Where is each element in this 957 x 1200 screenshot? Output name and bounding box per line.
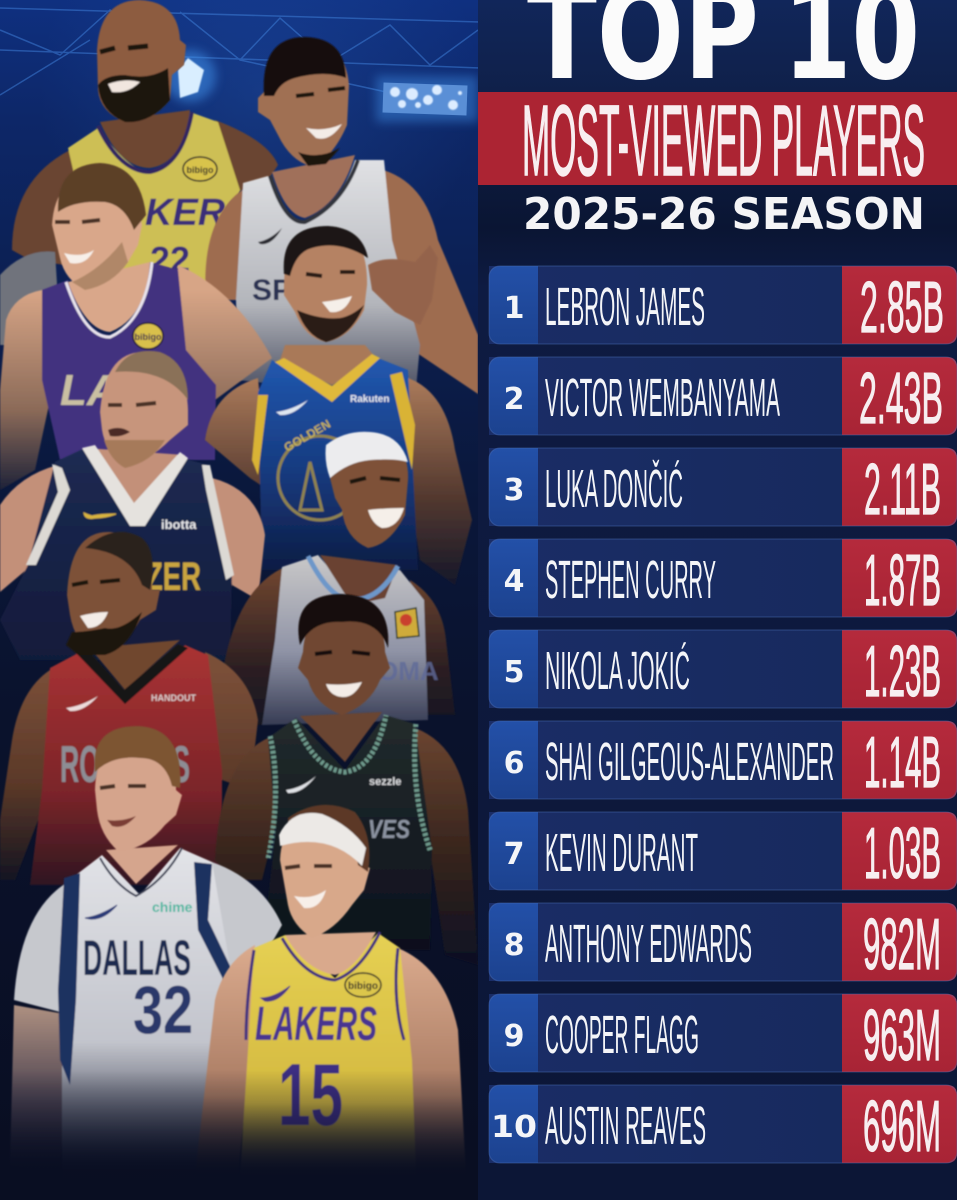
row 8: 8 [504, 928, 524, 963]
jersey lettering: OMA [378, 656, 439, 686]
jersey lettering: ZER [146, 555, 201, 599]
chest [272, 155, 355, 218]
smile [326, 682, 362, 697]
bibigo patch [183, 157, 217, 181]
hair [264, 37, 346, 96]
jersey trim [26, 464, 234, 580]
jersey trim [246, 948, 404, 1040]
jersey lettering: SP [252, 274, 292, 307]
ibotta logo: ibotta [161, 517, 197, 532]
nike swoosh [276, 400, 308, 415]
row 6 [489, 721, 957, 803]
head [100, 352, 188, 468]
rakuten logo: Rakuten [350, 394, 389, 405]
row 1: 1 [504, 291, 524, 326]
jersey [0, 448, 232, 660]
arms [0, 652, 258, 880]
head [280, 815, 370, 938]
jersey trim [252, 372, 415, 475]
sponsor patch [395, 608, 419, 638]
hair [85, 532, 153, 590]
eyes [100, 786, 146, 788]
player: Cooper Flagg [10, 726, 282, 1180]
chest [285, 932, 376, 975]
eyes [285, 866, 332, 868]
jersey [258, 358, 418, 570]
smile [368, 508, 404, 528]
smile [306, 124, 342, 139]
eyes [350, 478, 400, 482]
chest [90, 640, 180, 690]
row 10: 10 [491, 1110, 537, 1145]
player: LeBron James [0, 0, 278, 345]
jersey [236, 160, 420, 400]
nike swoosh [84, 513, 116, 518]
row 9: 9 [504, 1019, 524, 1054]
jersey neckline [270, 160, 358, 222]
row 4: 4 [504, 564, 524, 599]
player: Kevin Durant [0, 532, 258, 885]
jersey neckline [98, 112, 192, 172]
eyes [306, 272, 355, 276]
row 2 [489, 357, 957, 439]
arms [215, 728, 478, 965]
eyes [72, 580, 120, 585]
row 7: 7 [504, 837, 524, 872]
row 7: KEVIN DURANT [545, 823, 698, 883]
beard [104, 440, 165, 468]
eyes [108, 403, 156, 405]
jersey [68, 112, 240, 285]
row 3 [489, 448, 957, 530]
chime logo: chime [152, 899, 193, 915]
chest [100, 110, 190, 168]
head [97, 0, 186, 122]
player: Shai Gilgeous-Alexander [220, 432, 455, 725]
row 1: LEBRON JAMES [545, 277, 705, 337]
nike swoosh [258, 228, 282, 244]
stubble [72, 242, 128, 290]
beard [297, 305, 364, 342]
nike swoosh [66, 696, 98, 711]
stadium light left [164, 50, 216, 102]
row 7 [489, 812, 957, 894]
jersey lettering: DALLAS [83, 930, 191, 986]
player: Victor Wembanyama [205, 37, 478, 400]
hair [58, 163, 146, 230]
player: Anthony Edwards [215, 594, 478, 965]
arms [205, 375, 472, 585]
jersey collar [282, 932, 380, 980]
mouth [108, 428, 130, 436]
player: Nikola Jokic [0, 351, 265, 660]
hair [284, 226, 368, 276]
jersey neckline [308, 556, 398, 600]
stadium light right [376, 76, 478, 122]
sponsor logo: HANDOUT [151, 693, 196, 703]
jersey collar [275, 354, 380, 402]
chest [320, 555, 398, 605]
arms [0, 265, 272, 490]
bibigo patch: bibigo [186, 165, 214, 175]
arms [195, 945, 466, 1175]
chest [85, 448, 185, 515]
head [330, 438, 408, 548]
chest [106, 845, 178, 884]
row 5 [489, 630, 957, 712]
mouth [107, 816, 136, 827]
bottom fade [0, 1070, 480, 1200]
nike swoosh [261, 986, 290, 1001]
jersey collar [294, 715, 386, 772]
arms [12, 120, 278, 270]
head [284, 228, 367, 342]
jersey lettering: LAKERS [255, 998, 377, 1051]
jersey [240, 933, 416, 1175]
smile [80, 612, 108, 628]
hair [298, 594, 388, 648]
jersey [30, 645, 222, 885]
eyes [315, 652, 370, 654]
head [258, 38, 349, 166]
player: Austin Reaves [195, 805, 466, 1175]
chest [300, 712, 382, 762]
jersey straps [58, 862, 232, 1085]
row 8 [489, 903, 957, 985]
hair [115, 351, 188, 400]
sleeve [0, 251, 58, 345]
eyes [100, 46, 148, 52]
row 3: LUKA DONČIĆ [545, 459, 683, 519]
smile [294, 890, 326, 908]
nike swoosh [286, 776, 316, 793]
jersey number: 15 [278, 1045, 343, 1144]
jersey [262, 555, 428, 725]
jersey [42, 262, 216, 460]
eyes [296, 88, 345, 96]
warriors logo [278, 436, 362, 520]
jersey trim [268, 724, 430, 860]
jersey sleeves [14, 862, 282, 1020]
jersey lettering: LA [60, 366, 119, 415]
raised hand [368, 245, 438, 325]
row 5: 5 [504, 655, 524, 690]
headband [326, 432, 408, 478]
player: Luka Doncic [0, 163, 272, 490]
row 4 [489, 539, 957, 621]
goatee [298, 148, 340, 166]
smile [322, 296, 352, 312]
jersey lettering: VES [368, 814, 411, 844]
hair [288, 805, 369, 872]
bibigo patch [133, 323, 163, 349]
sezzle logo: sezzle [369, 776, 401, 788]
bibigo patch: bibigo [134, 332, 162, 342]
head [67, 532, 160, 655]
smile [108, 80, 140, 92]
warriors lettering: GOLDEN [282, 417, 333, 455]
bibigo patch: bibigo [348, 981, 378, 992]
arms [205, 168, 478, 394]
ranking table [489, 266, 957, 1167]
background: arena [0, 0, 480, 1200]
hair [95, 726, 180, 788]
right panel background [478, 0, 957, 1200]
row 9 [489, 994, 957, 1076]
row 3: 3 [504, 473, 524, 508]
arms [220, 567, 455, 725]
jersey neckline [66, 262, 152, 337]
jersey [62, 848, 236, 1180]
head [52, 175, 142, 290]
head [95, 740, 182, 851]
arms [10, 1005, 70, 1175]
head [298, 610, 390, 715]
jersey lettering: ROCKETS [60, 736, 190, 794]
jersey collar [78, 644, 188, 704]
subtitle: season: 2025-26 SEASON [523, 189, 925, 240]
row 10 [489, 1085, 957, 1167]
jersey collar [82, 445, 188, 526]
nike swoosh [85, 905, 117, 919]
player: Stephen Curry [205, 226, 472, 585]
jersey number: 22 [150, 239, 190, 280]
chest [280, 345, 376, 385]
row 5: NIKOLA JOKIĆ [545, 641, 690, 701]
bibigo patch [345, 973, 381, 997]
beard [98, 68, 170, 122]
row 6: 6 [504, 746, 524, 781]
jersey [262, 715, 432, 950]
jersey number: 32 [133, 972, 193, 1048]
headband [279, 813, 366, 866]
row 2: 2 [504, 382, 524, 417]
jersey lettering: KERS [145, 192, 251, 234]
jersey neckline [100, 848, 182, 896]
chest [68, 262, 150, 332]
arms [0, 465, 265, 600]
eyes [55, 220, 100, 222]
smile [64, 250, 94, 263]
beard [66, 612, 142, 655]
row 1 [489, 266, 957, 348]
